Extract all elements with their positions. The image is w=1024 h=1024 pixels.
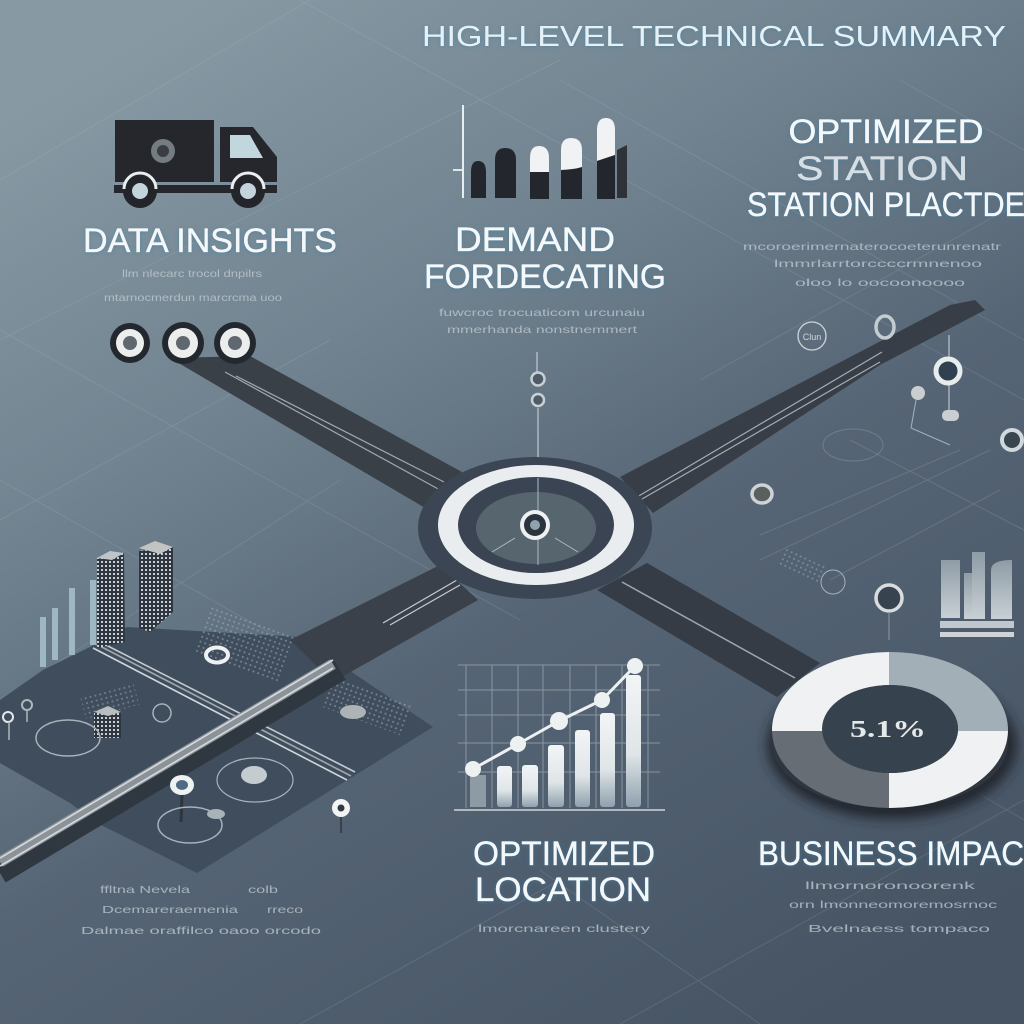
tower right [139,541,173,632]
road: north-west arm [170,356,462,512]
chart: growth bars optimized location [454,658,665,810]
text: map caption: ffltna Nevela [100,884,190,896]
text: data insights caption: llm nlecarc trocol dnpilrs [122,268,262,280]
icon: forecast bar chart [453,105,627,199]
icon: delivery truck [114,120,277,208]
thin blue bars [40,580,96,667]
text: location caption: lmorcnareen clustery [478,923,651,935]
heading: demand forecasting: FORDECATING [424,258,666,296]
text: map caption: colb [248,884,278,896]
heading: demand forecasting [424,221,666,296]
road: north-east arm [620,300,985,513]
text: map caption: Dcemareraemenia [102,904,238,916]
text: business caption: Bvelnaess tompaco [808,923,990,935]
small block building [94,706,121,738]
heading: optimized location: OPTIMIZED [473,835,655,873]
tower left [97,551,125,648]
road: south-east arm [597,563,820,697]
text: placement caption: lmmrlarrtorccccrmnenoo [774,258,982,270]
text: placement caption [743,241,1002,289]
heading: optimized station placement: OPTIMIZED [788,113,984,151]
node dots [110,322,256,364]
chart: donut 5.1%: 5.1% [850,717,926,743]
title: HIGH-LEVEL TECHNICAL SUMMARY [422,21,1006,53]
isometric city map panel [0,541,478,873]
heading: data insights: DATA INSIGHTS [83,222,337,260]
text: map caption [81,884,321,937]
text: business caption [789,880,997,935]
heading: optimized location [473,835,655,909]
network nodes and plan sketch [752,316,1024,594]
text: forecasting caption: mmerhanda nonstnemmert [447,324,637,336]
text: business caption: llmornoronoorenk [805,880,977,892]
text: business caption: orn lmonneomoremosrnoc [789,899,997,911]
map pins and cells [206,648,228,662]
heading: optimized station placement: STATION [796,150,968,188]
text: map caption: Dalmae oraffilco oaoo orcodo [81,925,321,937]
text: map caption: rreco [267,904,303,916]
chart: donut 5.1% [767,652,1017,819]
hub: central ring [418,457,652,599]
text: placement caption: oloo lo oocoonoooo [795,277,965,289]
pin above donut [876,585,902,640]
network nodes and plan sketch: Clun [803,332,821,342]
text: placement caption: mcoroerimernaterocoeterunrenatr [743,241,1002,253]
text: forecasting caption: fuwcroc trocuaticom urcunaiu [439,307,645,319]
text: data insights caption [104,268,282,304]
heading: demand forecasting: DEMAND [455,221,615,259]
mini city bar chart [940,552,1014,637]
text: data insights caption: mtarnocmerdun marcrcma uoo [104,292,282,304]
text: forecasting caption [439,307,645,336]
heading: optimized station placement [747,113,1024,224]
heading: optimized location: LOCATION [475,871,651,909]
connector with pins to hub [532,352,544,468]
